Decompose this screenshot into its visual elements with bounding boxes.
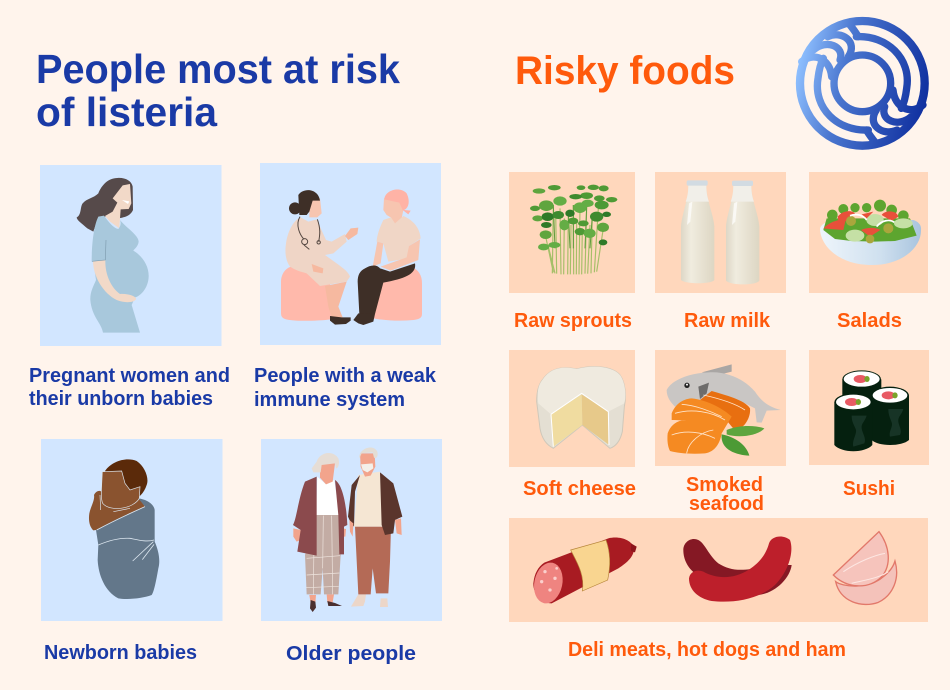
panel background: raw sprouts <box>509 172 635 293</box>
panel background: older people <box>261 439 442 621</box>
panel: soft cheese <box>509 350 636 500</box>
illustration: doctor and patient <box>281 190 422 325</box>
panel background: sushi <box>809 350 929 465</box>
illustration: ham slices <box>833 532 897 604</box>
label: pregnant women: their unborn babies <box>29 388 213 410</box>
panel background: weak immune system <box>260 163 441 345</box>
illustration: milk bottles <box>681 180 759 284</box>
label: pregnant women: Pregnant women and <box>29 365 230 387</box>
illustration: sprouts <box>530 185 617 274</box>
illustration: fish and salmon slices <box>667 364 781 456</box>
panel: raw milk <box>655 172 786 332</box>
panel background: salads <box>809 172 928 293</box>
label: deli meats: Deli meats, hot dogs and ham <box>568 639 846 661</box>
panel: pregnant women <box>29 165 230 410</box>
title: people most at risk: of listeria <box>36 89 218 135</box>
label: weak immune system: People with a weak <box>254 365 437 387</box>
label: weak immune system: immune system <box>254 389 405 411</box>
panel: weak immune system <box>254 163 441 411</box>
icon: circular swirl logo <box>800 21 925 146</box>
illustration: salami <box>530 538 637 606</box>
illustration: pregnant woman <box>77 178 149 333</box>
panel background: newborn babies <box>41 439 222 621</box>
illustration: soft cheese wedge cut <box>537 367 625 448</box>
title: risky foods: Risky foods <box>515 49 735 93</box>
illustration: hot dogs <box>683 537 792 602</box>
panel background: raw milk <box>655 172 786 293</box>
panel: older people <box>261 439 442 665</box>
title: people most at risk: People most at risk <box>36 46 400 92</box>
illustration: older couple <box>293 447 402 612</box>
panel background: deli meats <box>509 518 928 622</box>
label: smoked seafood: Smoked <box>686 474 763 496</box>
label: smoked seafood <box>686 474 764 515</box>
label: weak immune system <box>254 365 437 411</box>
panel: sushi <box>809 350 929 500</box>
panel background: pregnant women <box>40 165 222 346</box>
panel: raw sprouts <box>509 172 635 332</box>
label: sushi: Sushi <box>843 478 895 500</box>
label: older people: Older people <box>286 643 416 665</box>
label: smoked seafood: seafood <box>689 493 764 515</box>
panel background: smoked seafood <box>655 350 786 466</box>
label: pregnant women <box>29 365 230 410</box>
panel: smoked seafood <box>655 350 786 515</box>
panel: newborn babies <box>41 439 222 664</box>
label: salads: Salads <box>837 310 902 332</box>
title: people most at risk <box>36 46 400 135</box>
illustration: salad bowl <box>820 200 921 265</box>
illustration: swaddled newborn <box>89 459 159 599</box>
illustration: sushi rolls <box>834 370 909 451</box>
panel: salads <box>809 172 928 332</box>
label: raw sprouts: Raw sprouts <box>514 310 632 332</box>
panel: deli meats <box>509 518 928 661</box>
label: newborn babies: Newborn babies <box>44 642 197 664</box>
label: raw milk: Raw milk <box>684 310 771 332</box>
panel background: soft cheese <box>509 350 635 467</box>
label: soft cheese: Soft cheese <box>523 478 636 500</box>
